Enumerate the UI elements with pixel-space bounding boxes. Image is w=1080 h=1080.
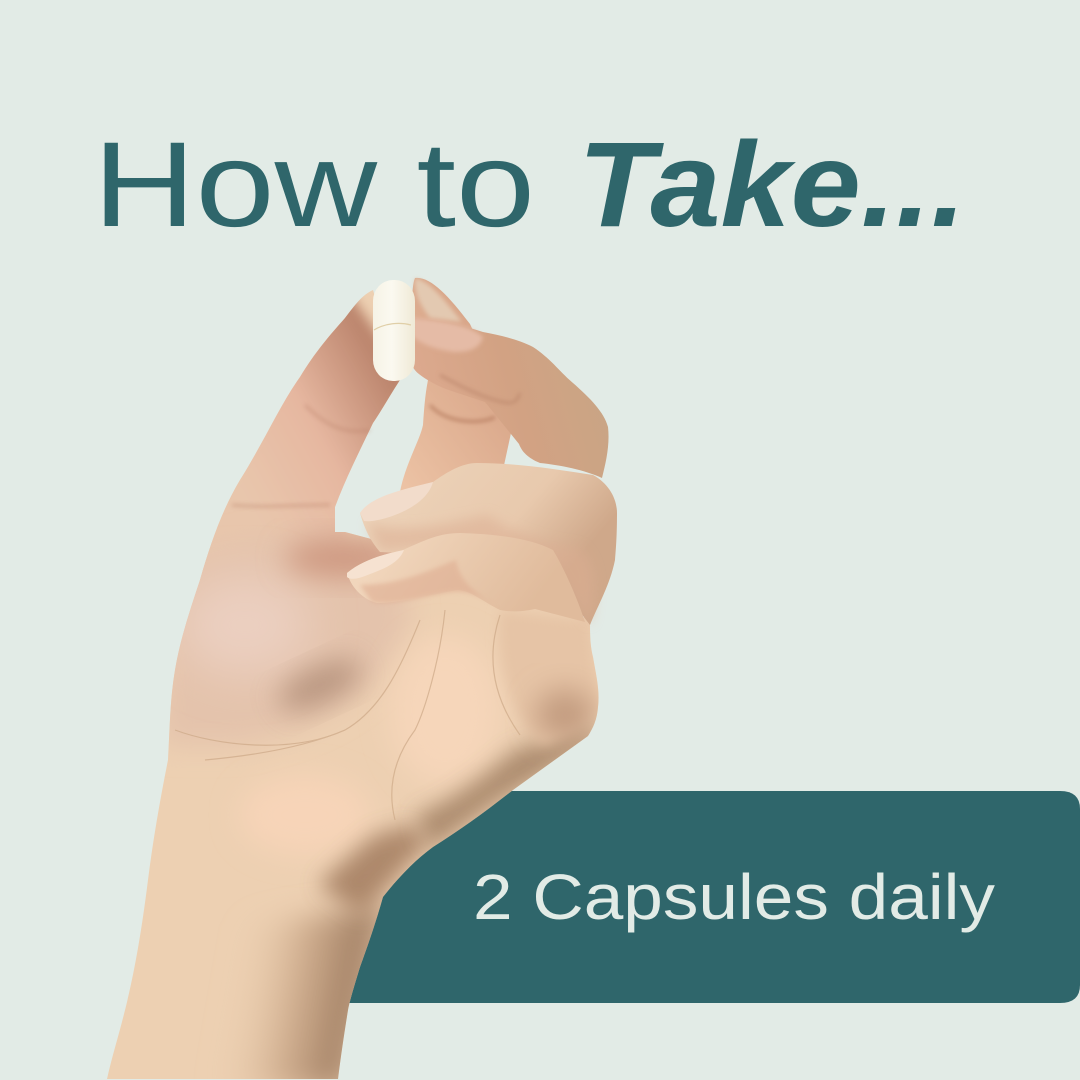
index nail [410, 318, 483, 352]
palm creases [175, 610, 520, 820]
thumb tone [202, 298, 400, 570]
capsule [373, 280, 415, 381]
palm and wrist [107, 280, 600, 1080]
wrist shading [246, 898, 382, 1079]
ring nail [360, 482, 433, 521]
pinky base tone [499, 610, 600, 745]
heel shadow [318, 825, 430, 915]
pinky finger [347, 533, 585, 622]
back finger [400, 278, 511, 492]
title [93, 116, 966, 252]
ring finger [360, 463, 617, 625]
title: take: Take... [578, 116, 966, 252]
thumb mound [169, 577, 404, 740]
pinky nail [347, 550, 404, 579]
banner label: 2 Capsules daily [473, 861, 995, 933]
title: how to: How to [93, 116, 535, 252]
banner shape [345, 791, 1080, 1003]
dosage banner [345, 791, 1080, 1003]
hand holding capsule [107, 278, 617, 1080]
thumb creases [232, 405, 370, 506]
index finger [409, 318, 609, 478]
palm highlights [404, 654, 480, 762]
infographic canvas [104, 138, 1080, 1079]
